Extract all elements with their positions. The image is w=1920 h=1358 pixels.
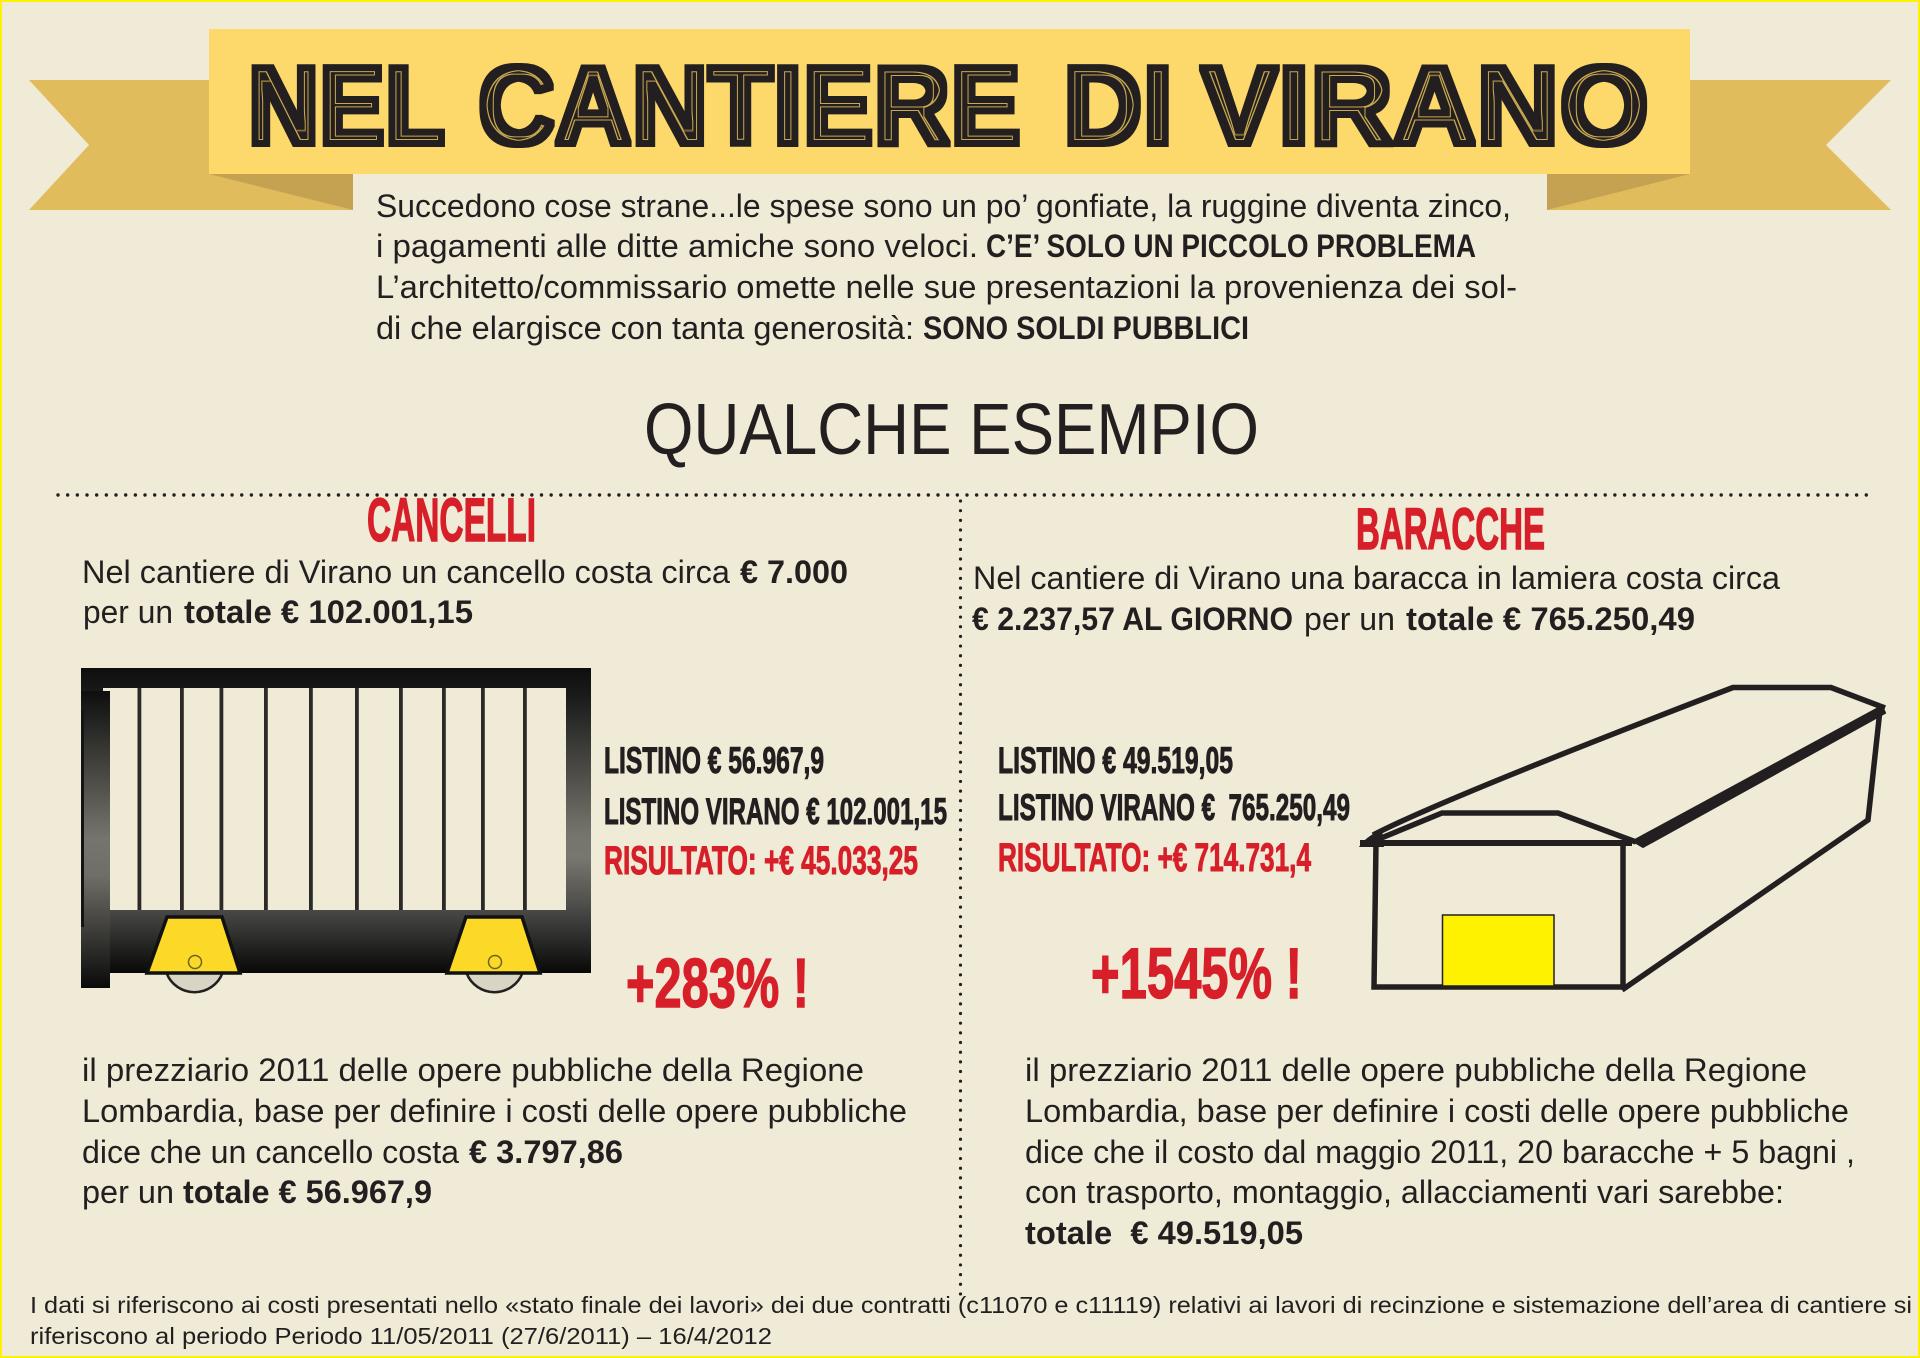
intro paragraph: C’E’ SOLO UN PICCOLO PROBLEMA [986, 228, 1476, 264]
panel: cancelli [81, 486, 947, 1210]
intro paragraph [376, 188, 1517, 346]
intro paragraph: i pagamenti alle ditte amiche sono veloci. [376, 228, 978, 264]
gate wheel brackets [147, 917, 540, 973]
title text: NEL [248, 44, 445, 168]
cancelli cost text [82, 554, 848, 630]
baracche cost text: € 2.237,57 AL GIORNO [972, 601, 1293, 637]
cancelli price list: LISTINO € 56.967,9 [604, 739, 824, 781]
baracche price list: RISULTATO: +€ 714.731,4 [998, 836, 1311, 880]
cancelli reference text: il prezziario 2011 delle opere pubbliche della Regione [82, 1052, 864, 1088]
panel: baracche [972, 497, 1885, 1251]
baracche reference text: il prezziario 2011 delle opere pubbliche della Regione [1025, 1052, 1807, 1088]
baracche cost text: Nel cantiere di Virano una baracca in lamiera costa circa [973, 560, 1780, 596]
title banner [29, 29, 1891, 210]
cancelli cost text: € 7.000 [740, 554, 848, 590]
baracche reference text: dice che il costo dal maggio 2011, 20 baracche + 5 bagni , [1025, 1134, 1855, 1170]
hut door [1442, 915, 1554, 986]
cancelli price list: LISTINO VIRANO € 102.001,15 [604, 790, 947, 832]
ribbon left fold [209, 174, 353, 210]
cancelli price list: RISULTATO: +€ 45.033,25 [604, 839, 918, 883]
gate bars [138, 688, 527, 910]
footnote: riferiscono al periodo Periodo 11/05/2011 (27/6/2011) – 16/4/2012 [30, 1323, 772, 1349]
cancelli reference text: € 3.797,86 [469, 1134, 623, 1170]
intro paragraph: SONO SOLDI PUBBLICI [923, 310, 1249, 346]
ribbon right fold [1547, 174, 1690, 210]
footnote [30, 1292, 1912, 1349]
baracche percentage: +1545% ! [1091, 935, 1302, 1014]
gate post [81, 688, 110, 988]
gate frame [81, 668, 591, 973]
title text: DI [1063, 44, 1173, 168]
cancelli percentage: +283% ! [626, 944, 809, 1022]
cancelli reference text: Lombardia, base per definire i costi delle opere pubbliche [82, 1093, 907, 1129]
icon: site hut [1359, 688, 1885, 990]
baracche price list: LISTINO € 49.519,05 [998, 739, 1233, 781]
ribbon right tail [1547, 80, 1891, 210]
gate wheels [166, 973, 522, 992]
baracche reference text: con trasporto, montaggio, allacciamenti vari sarebbe: [1025, 1174, 1784, 1210]
baracche reference text [1025, 1052, 1855, 1251]
intro paragraph: Succedono cose strane...le spese sono un po’ gonfiate, la ruggine diventa zinco, [376, 188, 1511, 224]
gate wheel pins [188, 956, 502, 968]
intro paragraph: di che elargisce con tanta generosità: [376, 310, 914, 346]
hut front wall [1374, 843, 1623, 987]
baracche cost text: per un [1304, 601, 1395, 637]
hut side wall [1622, 710, 1880, 990]
footnote: I dati si riferiscono ai costi presentati nello «stato finale dei lavori» dei due contratti (c11070 e c11119) relativi ai lavori di recinzione e sistemazione dell’area di cantiere si [30, 1292, 1912, 1318]
ribbon main band [209, 29, 1690, 174]
cancelli reference text: per un [82, 1174, 174, 1210]
baracche cost text [972, 560, 1780, 637]
cancelli cost text: per un [83, 594, 173, 630]
baracche price list: LISTINO VIRANO € 765.250,49 [998, 786, 1350, 828]
cancelli reference text: totale € 56.967,9 [183, 1174, 432, 1210]
baracche reference text: totale € 49.519,05 [1025, 1215, 1303, 1251]
heading: baracche: BARACCHE [1356, 497, 1545, 562]
hut roof [1359, 688, 1885, 847]
cancelli cost text: Nel cantiere di Virano un cancello costa circa [82, 554, 730, 590]
cancelli reference text: dice che un cancello costa [82, 1134, 459, 1170]
cancelli reference text [82, 1052, 907, 1210]
cancelli cost text: totale € 102.001,15 [184, 594, 473, 630]
title text [248, 44, 1649, 168]
title text: VIRANO [1201, 44, 1649, 168]
heading: cancelli: CANCELLI [367, 486, 536, 554]
section heading: QUALCHE ESEMPIO [644, 390, 1259, 470]
ribbon left tail [29, 80, 353, 210]
baracche price list [998, 739, 1350, 880]
title text: CANTIERE [478, 44, 1021, 168]
baracche cost text: totale € 765.250,49 [1406, 601, 1695, 637]
icon: sliding gate [81, 668, 591, 992]
intro paragraph: L’architetto/commissario omette nelle sue presentazioni la provenienza dei sol- [376, 269, 1517, 305]
baracche reference text: Lombardia, base per definire i costi delle opere pubbliche [1025, 1093, 1849, 1129]
cancelli price list [604, 739, 947, 883]
